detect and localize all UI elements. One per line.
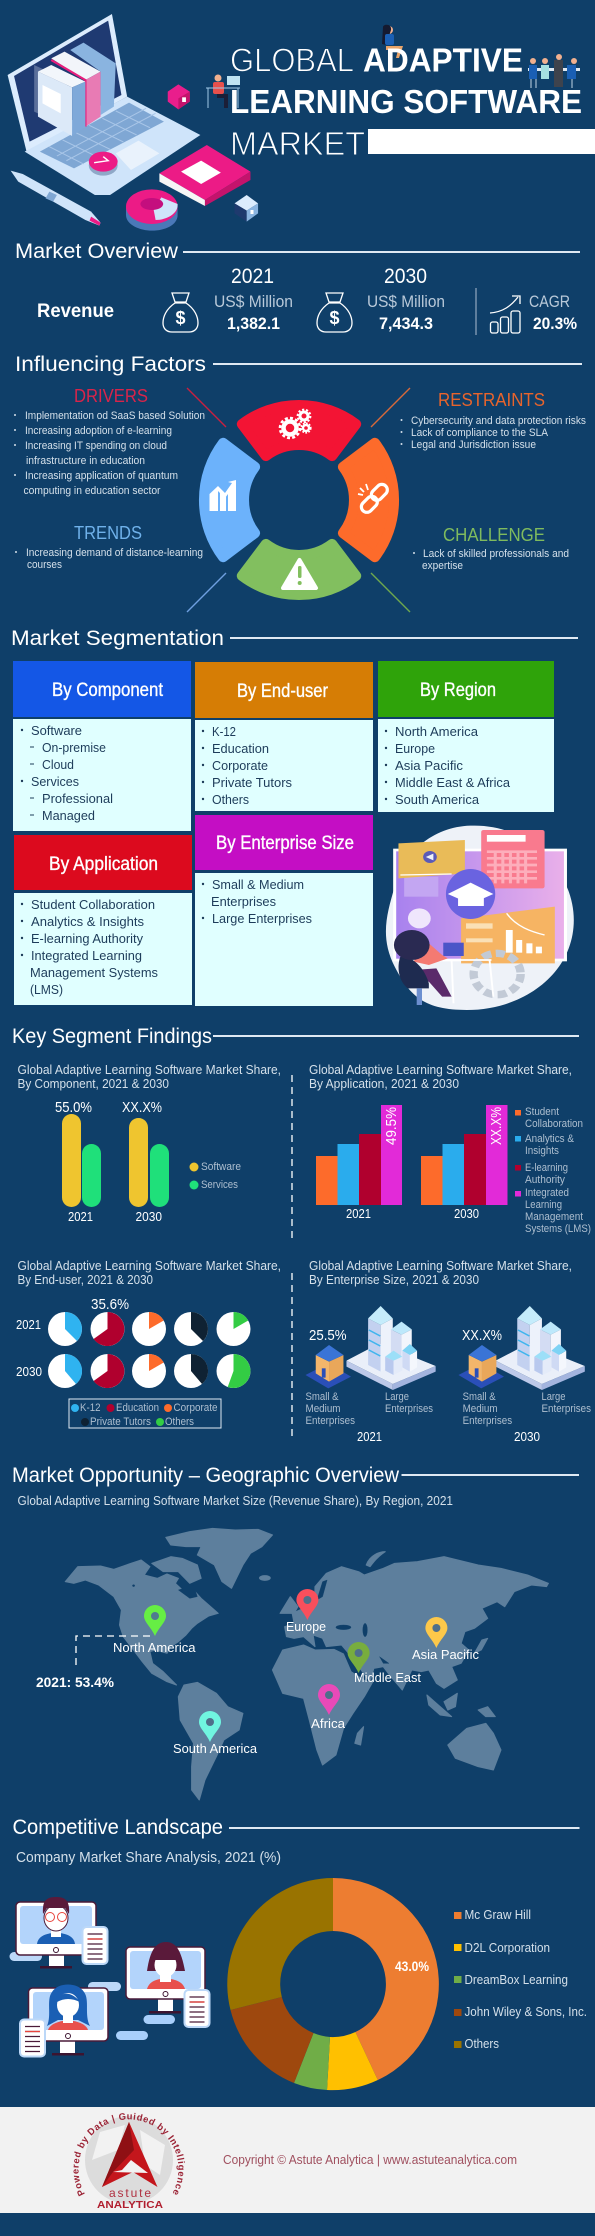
chart: by application bars: Integrated — [525, 1187, 569, 1199]
panel: by application: E-learning Authority — [31, 931, 143, 946]
panel: by enterprise size: Large Enterprises — [212, 911, 312, 926]
chart: by component bars: Software — [201, 1161, 241, 1173]
chart: by enterprise size buildings — [305, 1259, 591, 1444]
chart: by enterprise size buildings: Medium — [463, 1403, 498, 1415]
footer band — [0, 2107, 595, 2213]
chart: by component bars: 2030 — [136, 1209, 162, 1224]
icon: money bag 2030 — [317, 293, 352, 332]
chart: by application bars: E-learning — [525, 1162, 568, 1174]
panel: by component: Cloud — [42, 757, 74, 772]
chart: by end-user pies: 2030 — [16, 1364, 42, 1379]
title: LEARNING SOFTWARE — [230, 83, 582, 120]
chart: company share donut — [227, 1878, 439, 2090]
map callout: north america share — [36, 1636, 150, 1690]
panel: by end-user: Others — [212, 792, 249, 807]
chart: by end-user pies: By End-user, 2021 & 2030 — [18, 1273, 153, 1287]
title — [230, 42, 582, 162]
chart: by application bars: Management — [525, 1211, 583, 1223]
chart subtitle: region: Global Adaptive Learning Software Market Size (Revenue Share), By Region, 2021 — [18, 1494, 453, 1508]
panel: by end-user: Education — [212, 741, 269, 756]
panel: by application: By Application — [49, 854, 158, 875]
icon: broken chain — [358, 482, 390, 515]
panel: drivers: DRIVERS — [74, 386, 148, 406]
pin: middle east: Middle East — [354, 1670, 421, 1685]
legend: companies — [454, 1907, 587, 2051]
illustration: student at dashboard — [386, 826, 574, 1010]
chart: by application bars: 2030 — [454, 1206, 479, 1221]
chart: by enterprise size buildings: Large — [542, 1391, 566, 1403]
panel: trends: TRENDS — [74, 523, 142, 543]
chart: by end-user pies: 35.6% — [91, 1296, 129, 1313]
heading: market opportunity: Market Opportunity – Geographic Overview — [12, 1464, 400, 1487]
monitor: woman with fringe — [126, 1942, 210, 2027]
chart: by enterprise size buildings: Enterprises — [463, 1415, 513, 1427]
panel: challenge: CHALLENGE — [443, 525, 545, 545]
logo: astute analytica: ANALYTICA — [97, 2199, 163, 2211]
chart: by component bars: 2021 — [68, 1209, 93, 1224]
chart: factors ring — [187, 388, 410, 612]
chart: by component bars — [18, 1063, 281, 1224]
legend: companies: Mc Graw Hill — [464, 1907, 531, 1922]
panel: by end-user: Private Tutors — [212, 775, 292, 790]
pin: africa — [311, 1684, 346, 1731]
panel: challenge — [413, 525, 569, 572]
logo: astute analytica: Powered by Data | Guided by Intelligence — [74, 2112, 185, 2196]
chart: by enterprise size buildings: Enterprises — [306, 1415, 355, 1427]
panel: drivers: computing in education sector — [24, 485, 161, 497]
logo: astute analytica: astute — [109, 2186, 151, 2200]
chart: by end-user pies: 2021 — [16, 1317, 41, 1332]
panel: by region: Middle East & Africa — [395, 775, 511, 790]
chart: by enterprise size buildings: Medium — [306, 1403, 340, 1415]
panel: by application: (LMS) — [30, 982, 63, 997]
chart: by end-user pies: Global Adaptive Learning Software Market Share, — [18, 1259, 281, 1273]
panel: by component — [13, 661, 191, 831]
panel: by region — [378, 661, 554, 812]
title: MARKET — [230, 125, 365, 162]
chart: by application bars: 2021 — [346, 1206, 371, 1221]
title white bar — [368, 129, 595, 154]
chart: by application bars: Global Adaptive Learning Software Market Share, — [309, 1063, 572, 1077]
pin: middle east — [348, 1642, 421, 1685]
pin: asia pacific — [412, 1617, 479, 1662]
chart: by application bars: 49.5% — [383, 1107, 400, 1145]
icon: gears — [280, 410, 311, 438]
chart: by component bars: By Component, 2021 & 2030 — [18, 1077, 169, 1091]
panel: by application: Student Collaboration — [31, 897, 155, 912]
panel: by region: North America — [395, 724, 479, 739]
pin: asia pacific: Asia Pacific — [412, 1647, 479, 1662]
chart: by enterprise size buildings: Small & — [306, 1391, 339, 1403]
copyright: Copyright © Astute Analytica | www.astuteanalytica.com — [223, 2153, 517, 2167]
panel: trends: courses — [27, 559, 62, 571]
panel: restraints: Legal and Jurisdiction issue — [411, 439, 536, 451]
panel: revenue overview: 2030 — [384, 265, 427, 288]
panel: by end-user — [195, 662, 373, 811]
chart: by component bars: XX.X% — [122, 1099, 162, 1116]
panel: by enterprise size: Enterprises — [211, 894, 276, 909]
illustration: video call monitors — [10, 1897, 210, 2056]
chart: by component bars: Services — [201, 1179, 238, 1191]
pin: europe: Europe — [286, 1619, 326, 1634]
pin: south america: South America — [173, 1741, 258, 1756]
chart: by enterprise size buildings: Large — [385, 1391, 409, 1403]
chart: by application bars: Collaboration — [525, 1118, 583, 1130]
heading: competitive landscape: Competitive Landscape — [12, 1816, 223, 1839]
panel: by component: Services — [31, 774, 79, 789]
panel: drivers: infrastructure in education — [26, 455, 145, 467]
panel: by region: South America — [395, 792, 480, 807]
icon: growth chart — [210, 480, 236, 511]
illustration: laptop with books — [8, 14, 258, 231]
chart: by application bars: Learning — [525, 1199, 562, 1211]
panel: restraints — [400, 390, 586, 451]
panel: challenge: expertise — [422, 560, 463, 572]
panel: revenue overview: CAGR — [529, 292, 570, 311]
legend: companies: Others — [464, 2036, 499, 2051]
panel: drivers: Increasing application of quantum — [25, 470, 178, 482]
panel: by enterprise size — [195, 815, 373, 1006]
panel: revenue overview: Revenue — [37, 301, 114, 322]
panel: drivers: Implementation od SaaS based Solution — [25, 410, 205, 422]
heading: influencing factors: Influencing Factors — [15, 353, 206, 376]
legend: companies: DreamBox Learning — [464, 1972, 568, 1987]
world map — [65, 1528, 548, 1800]
legend: end-user — [69, 1399, 221, 1428]
panel: by enterprise size: Small & Medium — [212, 877, 304, 892]
chart: by component bars: Global Adaptive Learning Software Market Share, — [18, 1063, 281, 1077]
chart: by component bars: 55.0% — [55, 1099, 92, 1116]
panel: drivers — [14, 386, 205, 497]
chart: by application bars: Student — [525, 1106, 559, 1118]
panel: revenue overview: 1,382.1 — [227, 314, 280, 333]
title: GLOBAL — [230, 42, 354, 78]
panel: by component: By Component — [52, 680, 164, 701]
panel: by application — [14, 835, 192, 1005]
chart: company share donut: 43.0% — [395, 1958, 429, 1974]
panel: by component: Managed — [42, 808, 95, 823]
panel: by end-user: By End-user — [237, 681, 329, 702]
monitor: man — [16, 1897, 108, 1968]
heading: market segmentation: Market Segmentation — [11, 627, 224, 650]
chart: by application bars: Analytics & — [525, 1133, 575, 1145]
icon: cagr growth chart — [490, 296, 520, 333]
icon: money bag 2021: $ — [175, 308, 186, 328]
legend: end-user: Others — [165, 1416, 194, 1428]
panel: challenge: Lack of skilled professionals and — [423, 548, 569, 560]
panel: by application: Management Systems — [30, 965, 158, 980]
pin: africa: Africa — [311, 1716, 346, 1731]
panel: by region: Europe — [395, 741, 435, 756]
chart: by application bars — [309, 1063, 591, 1235]
chart: by enterprise size buildings: By Enterprise Size, 2021 & 2030 — [309, 1273, 479, 1287]
icon: money bag 2030: $ — [329, 308, 340, 328]
title: ADAPTIVE — [363, 42, 523, 78]
panel: revenue overview: US$ Million — [367, 292, 445, 311]
divider dashed — [291, 1075, 293, 1440]
panel: revenue overview — [37, 265, 577, 335]
heading: key segment findings: Key Segment Findings — [12, 1025, 212, 1048]
monitor: woman with blue hair — [20, 1984, 108, 2056]
panel: by component: On-premise — [42, 740, 106, 755]
icon: warning — [283, 560, 316, 588]
panel: by application: Integrated Learning — [31, 948, 142, 963]
legend: companies: D2L Corporation — [464, 1940, 550, 1955]
chart: by enterprise size buildings: Small & — [463, 1391, 496, 1403]
chart: by application bars: By Application, 2021 & 2030 — [309, 1077, 459, 1091]
panel: drivers: Increasing IT spending on cloud — [25, 440, 167, 452]
icon: money bag 2021 — [163, 293, 198, 332]
panel: by component: Software — [31, 723, 82, 738]
chart: by enterprise size buildings: Enterprises — [385, 1403, 433, 1415]
pin: north america — [113, 1605, 196, 1655]
legend: end-user: Education — [116, 1402, 159, 1414]
chart: by enterprise size buildings: 25.5% — [309, 1327, 346, 1344]
legend: end-user: Private Tutors — [90, 1416, 151, 1428]
chart: by enterprise size buildings: XX.X% — [462, 1327, 502, 1344]
chart: by application bars: Insights — [525, 1145, 559, 1157]
panel: revenue overview: 7,434.3 — [379, 314, 433, 333]
panel: by enterprise size: By Enterprise Size — [216, 833, 354, 854]
chart: by application bars: Authority — [525, 1174, 565, 1186]
pin: south america — [173, 1711, 258, 1756]
chart: by enterprise size buildings: 2021 — [357, 1429, 382, 1444]
heading: market overview: Market Overview — [15, 240, 179, 263]
panel: by component: Professional — [42, 791, 113, 806]
panel: by application: Analytics & Insights — [31, 914, 144, 929]
panel: drivers: Increasing adoption of e-learning — [25, 425, 172, 437]
pin: europe — [286, 1589, 326, 1634]
chart: by enterprise size buildings: 2030 — [514, 1429, 540, 1444]
panel: revenue overview: US$ Million — [214, 292, 293, 311]
illustration: people around title — [206, 25, 580, 108]
panel: by end-user: Corporate — [212, 758, 268, 773]
panel: revenue overview: 2021 — [231, 265, 274, 288]
chart: by application bars: XX.X% — [488, 1107, 505, 1145]
chart: by enterprise size buildings: Global Adaptive Learning Software Market Share, — [309, 1259, 572, 1273]
panel: restraints: RESTRAINTS — [438, 390, 545, 410]
chart: by end-user pies — [16, 1259, 281, 1428]
panel: by region: Asia Pacific — [395, 758, 463, 773]
panel: by end-user: K-12 — [212, 724, 236, 739]
legend: end-user: K-12 — [80, 1402, 100, 1414]
pin: north america: North America — [113, 1640, 196, 1655]
chart subtitle: company share: Company Market Share Analysis, 2021 (%) — [16, 1849, 281, 1866]
panel: revenue overview: 20.3% — [533, 314, 577, 333]
legend: end-user: Corporate — [174, 1402, 218, 1414]
panel: trends — [15, 523, 203, 571]
map callout: north america share: 2021: 53.4% — [36, 1674, 115, 1690]
panel: trends: Increasing demand of distance-learning — [26, 547, 203, 559]
panel: by region: By Region — [420, 680, 496, 701]
panel: restraints: Lack of compliance to the SLA — [411, 427, 549, 439]
